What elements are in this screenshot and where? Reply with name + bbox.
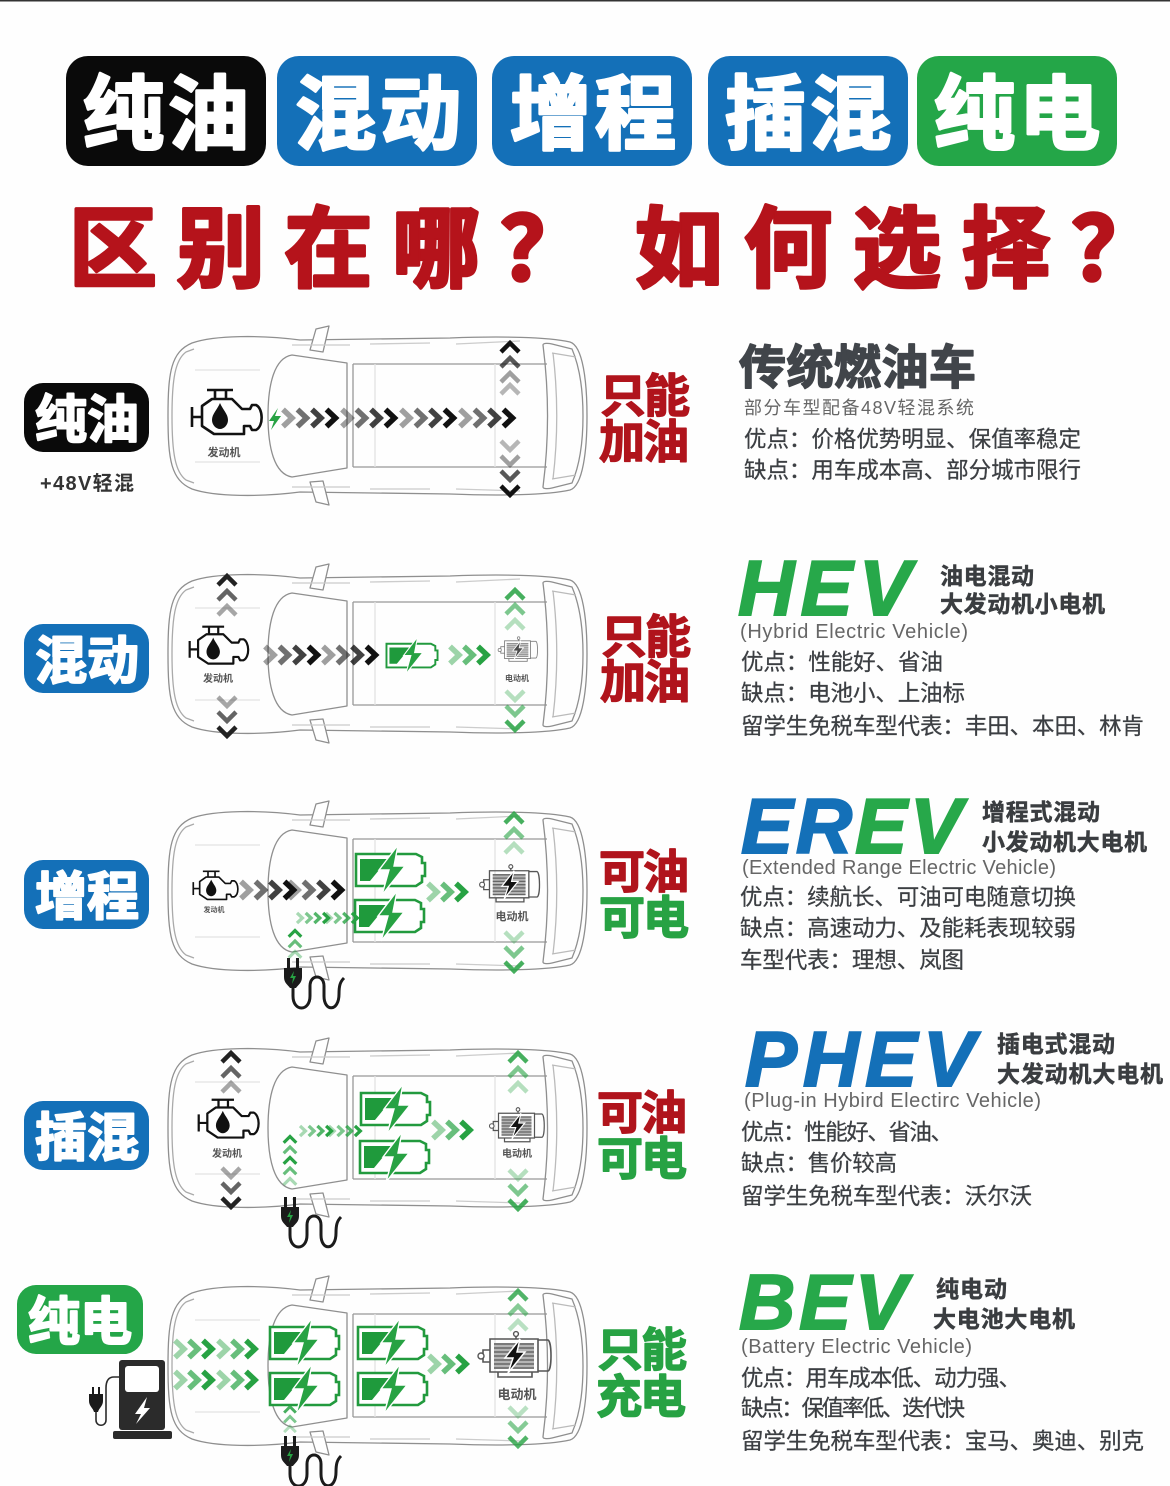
subtitle: 大发动机小电机 [940,591,1105,617]
subtitle: 大电池大电机 [933,1306,1075,1332]
arrows: motor wheels [509,1291,527,1446]
badge: 插混: 插混 [725,71,891,161]
subtitle [982,799,1147,855]
arrows: charging flow [175,1340,255,1388]
side badge: 增程 [24,860,149,929]
label: 可油可电: 可电 [599,892,689,944]
label: 只能加油: 加油 [600,656,690,708]
arrows: charge path [289,913,357,958]
full name: (Hybrid Electric Vehicle) [740,621,968,643]
description [739,1258,1144,1454]
label: 可油可电: 可油 [599,846,689,898]
side badge: 增程: 增程 [35,869,139,927]
arrows: motor wheels [506,590,524,730]
icon: plug [284,958,344,1008]
heading: BEV: BEV [739,1258,913,1346]
engine label: 发动机 [208,445,240,459]
motor label: 电动机 [497,1387,537,1402]
heading: 传统燃油车 [739,341,976,394]
motor label: 电动机 [502,1147,532,1160]
arrows: motor wheels [509,1053,527,1209]
icon: engine [192,390,262,434]
badge: 纯油: 纯油 [83,71,249,161]
pros: 优点：续航长、可油可电随意切换 [740,885,1076,910]
icon: batteries [360,1084,430,1182]
subtitle: 油电混动 [940,563,1034,589]
car diagram [168,326,587,505]
engine label: 发动机 [212,1147,242,1160]
subtitle [997,1031,1163,1087]
icon: plug [281,1197,341,1247]
arrows: batteries to motor [429,1356,466,1372]
description [740,782,1147,973]
pros: 优点：性能好、省油、 [741,1120,953,1145]
cons: 缺点：售价较高 [741,1151,897,1176]
description [741,1015,1163,1209]
icon: small bolt [269,408,281,430]
arrows: batteries to motor [428,884,465,900]
icon: engine [193,871,238,899]
label: 可油可电: 可电 [597,1133,687,1185]
subtitle: 增程式混动 [982,799,1100,825]
note: +48V轻混: +48V轻混 [40,472,134,495]
label: 可油可电: 可油 [597,1087,687,1139]
subtitle [940,563,1105,617]
models: 车型代表：理想、岚图 [740,948,964,973]
engine label: 发动机 [204,905,224,914]
motor label: 电动机 [496,909,528,923]
badge: 混动 [277,56,477,166]
arrows: engine to batteries [241,882,342,898]
panel: 插混 row [24,1015,1163,1247]
cons: 缺点：用车成本高、部分城市限行 [744,458,1081,483]
icon: rear batteries [358,1318,427,1414]
arrows: charge path [284,1407,296,1432]
icon: front batteries [270,1318,339,1414]
badge: 混动: 混动 [295,71,461,161]
models: 留学生免税车型代表：宝马、奥迪、别克 [741,1429,1144,1454]
side badge: 混动: 混动 [35,633,139,691]
badge: 插混 [708,56,908,166]
side badge: 插混: 插混 [35,1110,139,1168]
icon: battery [386,637,438,674]
icon: engine [190,627,248,664]
car diagram [168,1038,587,1247]
label: 只能加油: 只能 [600,370,690,422]
icon: motor [480,865,540,902]
panel: 混动 row [24,544,1144,743]
description [739,341,1081,483]
arrows: engine wheels [222,1053,240,1207]
label: 可油可电 [599,846,689,944]
badge: 增程 [492,56,692,166]
side badge: 混动 [24,624,149,693]
icon: engine [199,1100,259,1138]
side badge: 纯油 [24,383,149,452]
full name: (Extended Range Electric Vehicle) [742,857,1056,879]
side badge: 纯电 [17,1285,143,1354]
badge: 纯油 [66,56,266,166]
arrows: engine to battery [265,646,376,664]
arrows: engine wheels [218,576,236,736]
models: 留学生免税车型代表：沃尔沃 [741,1184,1032,1209]
full name: (Battery Electric Vehicle) [741,1336,972,1358]
heading: EREV: EREV [741,782,968,870]
icon: plug [281,1436,341,1486]
label: 只能加油: 只能 [601,611,691,663]
subtitle: 小发动机大电机 [982,829,1147,855]
subtitle: 大发动机大电机 [997,1061,1163,1087]
pros: 优点：用车成本低、动力强、 [741,1366,1021,1391]
side badge: 纯油: 纯油 [35,392,139,450]
cons: 缺点：保值率低、迭代快 [741,1396,965,1421]
label: 只能加油 [599,370,690,468]
description [738,544,1144,739]
panel: 增程 row [24,782,1147,1008]
pros: 优点：性能好、省油 [741,650,943,675]
label: 只能加油 [600,611,691,708]
badge: 纯电 [917,56,1117,166]
subtitle: 插电式混动 [997,1031,1115,1057]
label: 只能充电 [596,1324,687,1423]
label: 只能充电: 只能 [597,1324,687,1376]
car diagram [168,801,587,1008]
label: 可油可电 [597,1087,687,1185]
arrows: engine to wheels [283,410,512,426]
badge: 增程: 增程 [510,71,676,161]
label: 只能充电: 充电 [596,1371,686,1423]
pros: 优点：价格优势明显、保值率稳定 [744,427,1081,452]
arrows: batteries to motor [433,1122,470,1138]
icon: motor [498,637,538,661]
heading: HEV: HEV [738,544,917,632]
arrows: front wheels [501,343,519,495]
panel: 纯油 row [24,326,1081,505]
panel: 纯电 row [17,1258,1144,1486]
motor label: 电动机 [505,673,529,683]
subtitle: 纯电动 [936,1276,1007,1302]
models: 留学生免税车型代表：丰田、本田、林肯 [741,714,1144,739]
title badges row [66,56,1117,166]
engine label: 发动机 [203,672,233,685]
cons: 缺点：高速动力、及能耗表现较弱 [740,916,1076,941]
car diagram [168,564,587,743]
badge: 纯电: 纯电 [934,71,1100,161]
cons: 缺点：电池小、上油标 [741,681,965,706]
headline: 如何选择？: 如何选择？ [635,200,1159,299]
arrows: charge path [284,1126,360,1185]
subtitle: 部分车型配备48V轻混系统 [744,398,974,418]
side badge: 插混 [24,1101,149,1170]
label: 只能加油: 加油 [599,416,689,468]
arrows: battery to motor [450,646,487,664]
icon: motor [478,1332,551,1377]
full name: (Plug-in Hybird Electirc Vehicle) [744,1090,1041,1112]
arrows: motor wheels [505,814,523,971]
side badge: 纯电: 纯电 [28,1294,132,1352]
heading: PHEV: PHEV [745,1015,981,1103]
car diagram [168,1276,587,1486]
icon: batteries [355,845,425,941]
icon: motor [490,1108,544,1142]
headline: 区别在哪？: 区别在哪？ [69,200,588,299]
subtitle [933,1276,1075,1332]
icon: charging station [89,1360,172,1439]
